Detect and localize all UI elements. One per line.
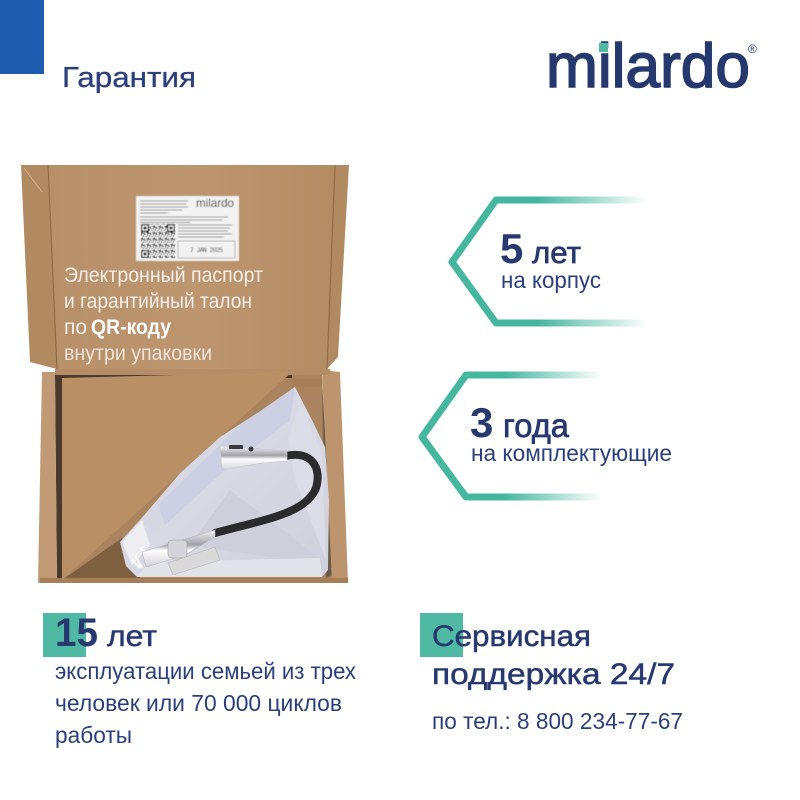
description: эксплуатации семьей из трех xyxy=(55,658,356,684)
chevron xyxy=(452,200,647,323)
lid caption: QR-коду xyxy=(91,316,171,339)
package label with QR code xyxy=(136,196,239,261)
label logo: milardo xyxy=(196,196,234,210)
warranty badge: 5 years: на корпус xyxy=(501,267,601,293)
date stamp: 7 JAN 2025 xyxy=(190,247,223,254)
logo dot xyxy=(599,43,608,52)
heading: Сервисная xyxy=(432,620,591,653)
cardboard triangle insert xyxy=(62,372,292,580)
label fine print xyxy=(140,201,232,237)
teal accent xyxy=(43,613,86,657)
block: 15 years: человек или 70 000 циклов xyxy=(55,690,342,716)
heading: Гарантия xyxy=(62,62,196,94)
warranty badge: 5 years: лет xyxy=(532,235,581,270)
block: service support: поддержка 24/7 xyxy=(432,658,675,691)
registered mark: ® xyxy=(748,42,757,56)
box base xyxy=(38,369,348,583)
badge text: 5 xyxy=(500,225,523,272)
faucet body xyxy=(142,530,215,567)
teal accent xyxy=(420,613,463,657)
phone: по тел.: 8 800 234-77-67 xyxy=(432,708,683,734)
lid caption: Электронный паспорт xyxy=(64,264,263,287)
heading: 15 xyxy=(55,611,98,655)
lid caption: по xyxy=(64,316,87,339)
spray head xyxy=(220,446,287,470)
lid caption xyxy=(64,264,263,365)
block: service support xyxy=(420,613,683,734)
corner accent square xyxy=(0,0,44,74)
lid caption: внутри упаковки xyxy=(64,342,212,365)
box lid xyxy=(21,165,349,369)
lever xyxy=(168,547,220,575)
QR code xyxy=(141,224,175,258)
block: 15 years: лет xyxy=(107,620,157,653)
logo: milardo: milardo xyxy=(546,32,750,101)
chevron xyxy=(422,375,600,497)
warranty badge: 3 years: на комплектующие xyxy=(471,440,672,466)
warranty badge: 5 years xyxy=(452,200,647,323)
photo: open cardboard box with faucet xyxy=(21,165,349,583)
badge text: 3 xyxy=(470,399,493,446)
block: 15 years xyxy=(43,611,356,748)
flexible hose xyxy=(215,455,318,533)
block: 15 years: работы xyxy=(55,722,132,748)
white textile bag xyxy=(120,387,329,577)
lid caption: и гарантийный талон xyxy=(64,290,252,313)
faucet xyxy=(142,445,318,575)
warranty badge: 3 years: года xyxy=(503,407,570,444)
warranty badge: 3 years xyxy=(422,375,672,497)
